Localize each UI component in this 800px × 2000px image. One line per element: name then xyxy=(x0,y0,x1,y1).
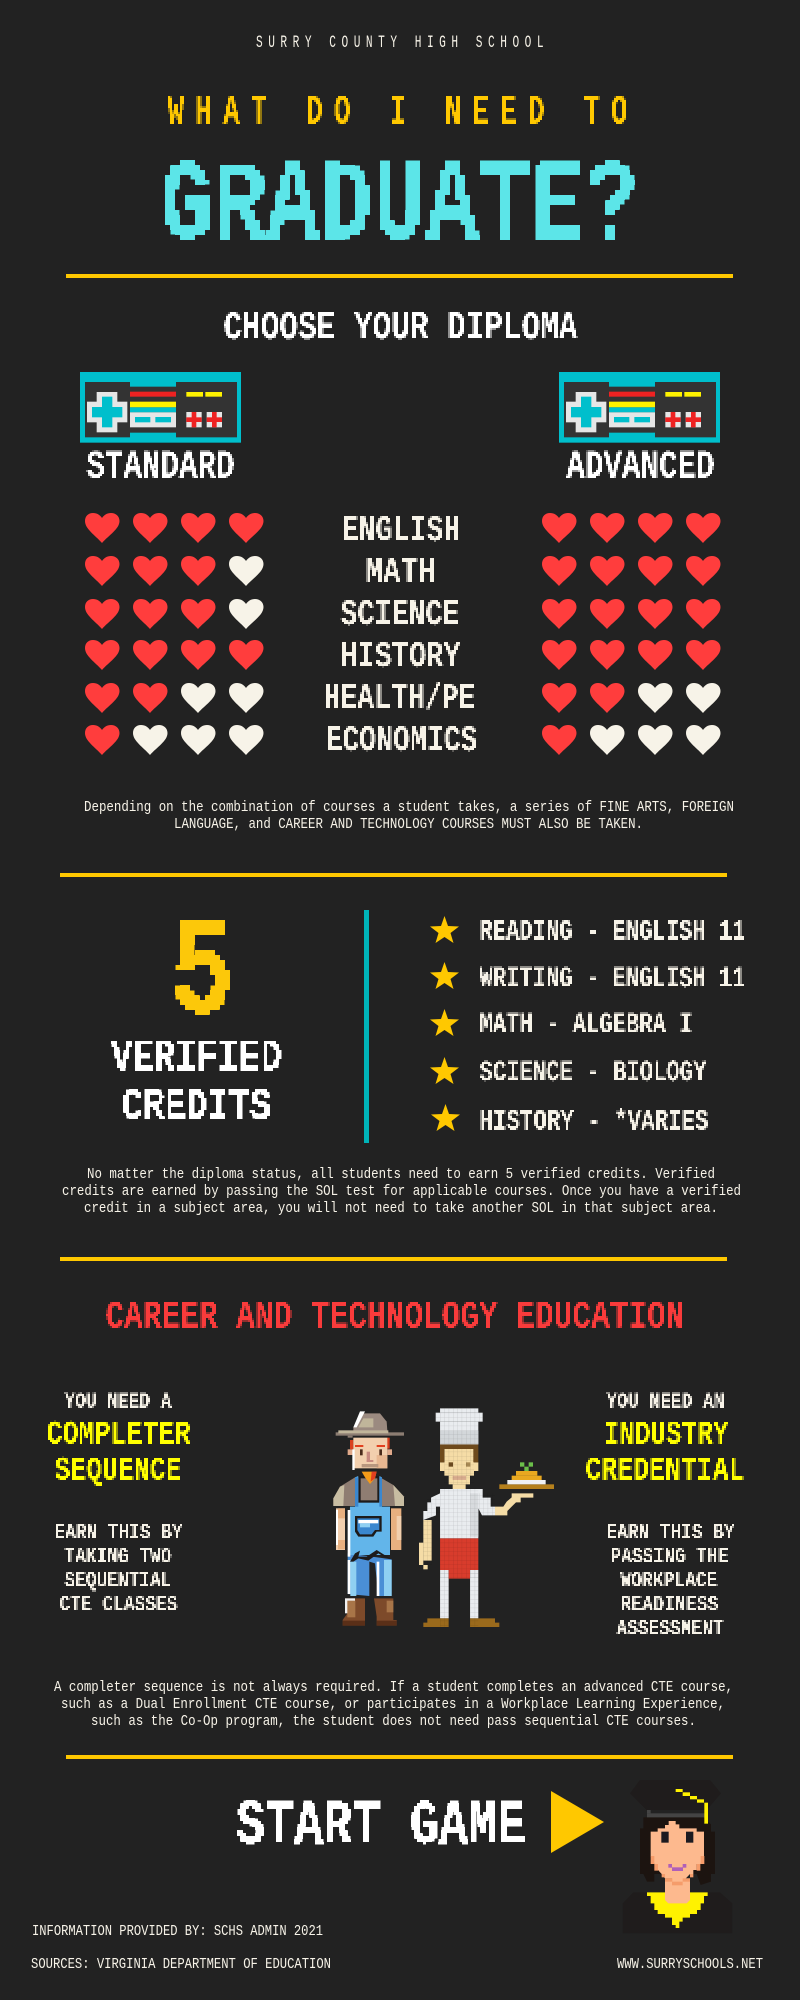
highlight: industry credential: INDUSTRY xyxy=(603,1416,728,1453)
divider xyxy=(66,1755,733,1759)
torso and sleeves xyxy=(423,1489,495,1538)
head xyxy=(440,1462,478,1471)
note: verified credits xyxy=(62,1166,741,1217)
illustration: graduate xyxy=(623,1780,732,1933)
title xyxy=(160,88,638,273)
boots xyxy=(343,1598,365,1626)
number five: 5 xyxy=(170,894,234,1055)
note: additional courses: LANGUAGE, and CAREER AND TECHNOLOGY COURSES MUST ALSO BE TAKEN. xyxy=(174,816,643,833)
highlight: industry credential: CREDENTIAL xyxy=(585,1452,744,1489)
right arm xyxy=(495,1493,533,1515)
neck and bandana xyxy=(362,1472,377,1484)
legs and shoes xyxy=(440,1570,449,1618)
vertical divider xyxy=(364,910,369,1143)
panel: standard diploma xyxy=(80,372,241,490)
divider xyxy=(60,1257,727,1261)
list labels xyxy=(479,915,745,1139)
subject labels: HISTORY xyxy=(340,636,460,677)
label: verified credits: CREDITS xyxy=(122,1082,271,1133)
legs xyxy=(348,1553,392,1596)
highlight: completer sequence xyxy=(46,1416,190,1489)
pocket xyxy=(355,1516,382,1537)
divider xyxy=(66,274,733,278)
label: advanced: ADVANCED xyxy=(566,445,714,490)
description xyxy=(54,1520,183,1617)
title line one: WHAT DO I NEED TO xyxy=(167,88,638,136)
hair xyxy=(640,1817,715,1885)
heading: choose your diploma: CHOOSE YOUR DIPLOMA xyxy=(223,306,577,351)
subject labels xyxy=(323,510,477,761)
eyes xyxy=(661,1832,669,1843)
neck xyxy=(453,1484,466,1489)
footer: credits: INFORMATION PROVIDED BY: SCHS ADMIN 2021 xyxy=(32,1923,323,1940)
icon: game controller xyxy=(80,372,241,443)
face xyxy=(651,1821,704,1882)
subject labels: ENGLISH xyxy=(341,510,460,551)
overalls xyxy=(348,1476,390,1555)
description: CTE CLASSES xyxy=(59,1592,177,1617)
description: TAKING TWO xyxy=(64,1544,171,1569)
toque xyxy=(440,1408,478,1413)
subject labels: SCIENCE xyxy=(340,594,459,635)
grid overlay xyxy=(423,1408,495,1627)
hearts: standard diploma credits xyxy=(85,513,264,755)
lead-in: YOU NEED A xyxy=(64,1389,172,1414)
label: verified credits: VERIFIED xyxy=(111,1033,282,1084)
hat xyxy=(353,1413,387,1431)
apron xyxy=(440,1538,478,1579)
label: verified credits xyxy=(111,1033,282,1133)
note: completer sequence exceptions: such as the Co-Op program, the student does not need pass sequential CTE courses. xyxy=(91,1713,696,1730)
head xyxy=(348,1449,353,1455)
label: standard: STANDARD xyxy=(86,445,234,490)
highlight: completer sequence: COMPLETER xyxy=(46,1416,190,1453)
highlight: completer sequence: SEQUENCE xyxy=(54,1452,181,1489)
cap xyxy=(630,1780,721,1810)
start game: START GAME xyxy=(236,1791,526,1862)
tray and food xyxy=(499,1484,554,1489)
icon: play arrow xyxy=(551,1791,604,1853)
note: additional courses xyxy=(84,799,734,833)
subject labels: ECONOMICS xyxy=(325,720,477,761)
school name: SURRY COUNTY HIGH SCHOOL xyxy=(256,34,549,53)
lead-in: YOU NEED AN xyxy=(606,1389,724,1414)
highlight: industry credential xyxy=(585,1416,744,1489)
note: completer sequence exceptions xyxy=(54,1679,733,1730)
description: READINESS xyxy=(620,1592,718,1617)
panel: advanced diploma xyxy=(559,372,720,490)
subject labels: HEALTH/PE xyxy=(323,678,475,719)
footer: website: WWW.SURRYSCHOOLS.NET xyxy=(617,1956,763,1973)
hearts: advanced diploma credits xyxy=(542,513,720,755)
description xyxy=(606,1520,735,1641)
shirt xyxy=(333,1477,404,1506)
panel: industry credential xyxy=(585,1389,744,1641)
arms xyxy=(336,1508,345,1550)
neck xyxy=(665,1878,690,1903)
description: EARN THIS BY xyxy=(606,1520,735,1545)
left arm xyxy=(423,1520,432,1561)
collar xyxy=(647,1892,708,1928)
list labels: SCIENCE - BIOLOGY xyxy=(479,1056,706,1090)
illustration: chef xyxy=(419,1408,554,1627)
description: EARN THIS BY xyxy=(54,1520,183,1545)
description: ASSESSMENT xyxy=(616,1616,723,1641)
icons: stars xyxy=(430,916,460,1131)
footer: credits xyxy=(31,1923,331,1973)
list labels: MATH - ALGEBRA I xyxy=(479,1008,692,1042)
tassel xyxy=(676,1789,708,1824)
mouth xyxy=(668,1864,672,1868)
robe xyxy=(623,1892,732,1933)
divider xyxy=(60,873,727,877)
description: SEQUENTIAL xyxy=(64,1568,171,1593)
description: WORKPLACE xyxy=(620,1568,717,1593)
footer: credits: SOURCES: VIRGINIA DEPARTMENT OF EDUCATION xyxy=(31,1956,331,1973)
list: required verified credits xyxy=(430,915,745,1139)
description: PASSING THE xyxy=(610,1544,728,1569)
panel: completer sequence xyxy=(46,1389,190,1617)
subject labels: MATH xyxy=(365,552,435,593)
icon: game controller xyxy=(559,372,720,443)
illustration: farmer xyxy=(333,1411,404,1626)
list labels: HISTORY - *VARIES xyxy=(479,1105,708,1139)
title line two: GRADUATE? xyxy=(160,144,638,273)
panel: verified credits xyxy=(111,894,282,1133)
